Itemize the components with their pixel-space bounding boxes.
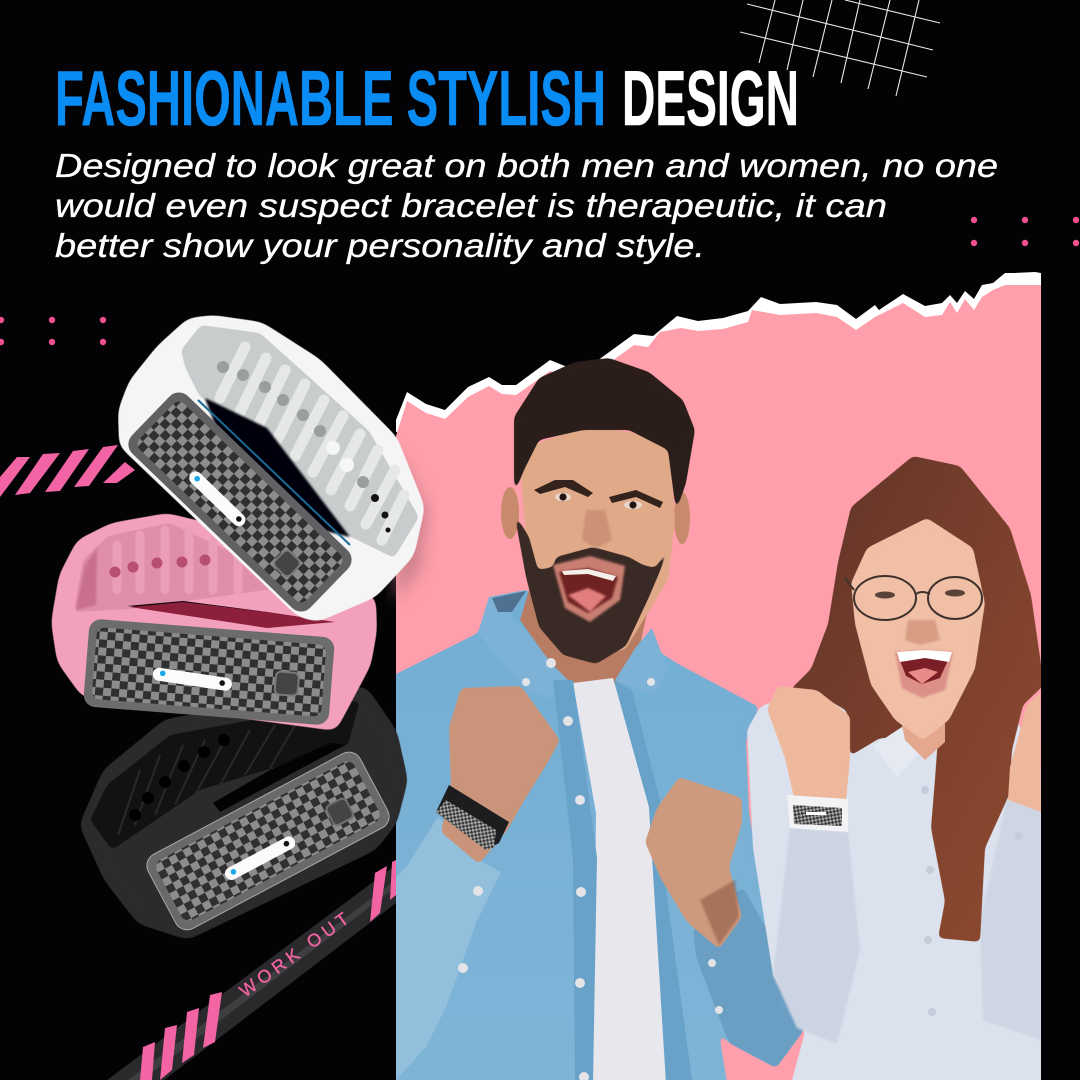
woman bracelet — [787, 795, 848, 832]
woman sleeve shade — [773, 828, 860, 1044]
body text: Designed to look great on both men and women, no one — [55, 147, 998, 184]
woman glasses — [845, 576, 982, 620]
title: FASHIONABLE STYLISH — [55, 54, 606, 142]
shadow of white bracelet on panel — [396, 450, 428, 600]
woman neck — [900, 715, 945, 760]
woman nose — [905, 620, 940, 645]
right black margin — [1041, 286, 1080, 1080]
man neck — [520, 590, 650, 690]
photo: man — [380, 358, 804, 1080]
white band opening — [205, 398, 350, 537]
strip pink bars — [140, 860, 396, 1080]
man plackets — [553, 680, 692, 1080]
woman face — [851, 518, 985, 740]
woman shirt buttons — [921, 786, 1023, 1016]
man wrist bracelet — [436, 785, 509, 850]
pink dots right — [971, 217, 1079, 246]
bracelet: pink — [51, 513, 377, 731]
pink inner ribs — [74, 523, 300, 612]
left margin mask for photo — [300, 640, 396, 1080]
body text — [55, 147, 998, 264]
strip: work out band — [107, 860, 396, 1080]
man shirt — [380, 590, 804, 1080]
decorative white grid top right — [740, 0, 940, 96]
man collar — [478, 590, 668, 705]
man shirt buttons — [458, 658, 723, 1080]
woman left fist — [767, 686, 850, 802]
woman collar — [873, 725, 930, 777]
man t-shirt — [573, 678, 666, 1080]
title: DESIGN — [622, 54, 799, 142]
woman eyes — [875, 590, 965, 598]
woman shirt — [747, 690, 1060, 1080]
woman hair — [789, 456, 1044, 942]
man sleeves — [396, 817, 501, 1080]
pink stripes left — [0, 445, 135, 497]
woman right fist — [1008, 693, 1041, 812]
black inner ribs — [90, 700, 360, 850]
photo: woman — [747, 456, 1060, 1080]
pink dots left — [0, 317, 106, 345]
man right fist — [645, 777, 742, 949]
body text: would even suspect bracelet is therapeutic, it can — [55, 187, 887, 224]
strip label: WORK OUT — [236, 909, 353, 1001]
man head — [501, 358, 695, 664]
man left fist — [441, 686, 560, 864]
bracelet: black — [79, 686, 408, 940]
white inner ribs — [181, 325, 419, 558]
pink torn paper panel — [396, 272, 1041, 1080]
bracelet: white — [118, 315, 425, 622]
body text: better show your personality and style. — [55, 227, 705, 264]
woman mouth — [895, 650, 953, 698]
